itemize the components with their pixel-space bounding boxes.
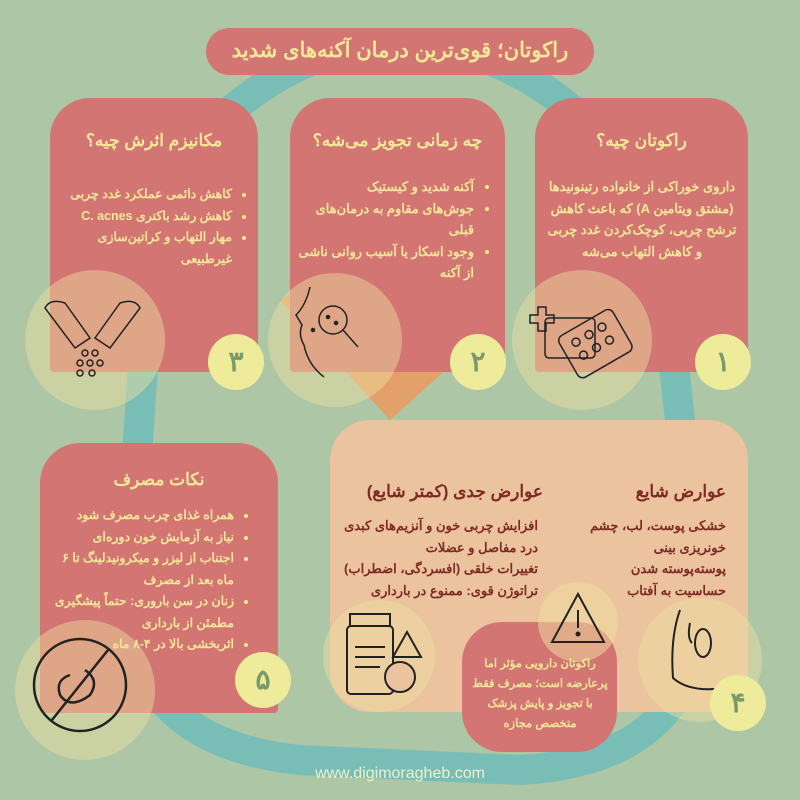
text serious — [344, 517, 538, 598]
text 5: اجتناب از لیزر و میکرونیدلینگ تا ۶ ماه بعد از مصرف — [62, 551, 234, 586]
icon: capsule — [44, 300, 141, 377]
text 5: اثربخشی بالا در ۴-۸ ماه — [112, 637, 234, 651]
icon: face magnifier — [295, 286, 358, 378]
icon: no pregnancy — [15, 620, 155, 760]
icon: pills blister — [529, 306, 633, 378]
icon: bottle — [346, 613, 423, 695]
number 4 — [710, 675, 766, 731]
text serious: تراتوژن قوی: ممنوع در بارداری — [371, 582, 538, 598]
text common — [590, 518, 726, 598]
heading serious: عوارض جدی (کمتر شایع) — [367, 482, 543, 501]
text common: خشکی پوست، لب، چشم — [590, 518, 726, 533]
number 2: ٢ — [470, 346, 486, 377]
number 5 — [235, 652, 291, 708]
text common: پوسته‌پوسته شدن — [631, 561, 726, 576]
text common: حساسیت به آفتاب — [627, 582, 726, 598]
text 5 — [55, 508, 248, 652]
text 2: وجود اسکار یا آسیب روانی ناشی از آکنه — [298, 244, 474, 280]
text 2 — [298, 178, 489, 280]
panel: usage tips — [40, 443, 278, 713]
text 5: زنان در سن باروری: حتماً پیشگیری مطمئن از بارداری — [55, 594, 234, 630]
panel: what is roaccutane — [535, 98, 748, 372]
text common: خونریزی بینی — [654, 540, 726, 554]
panel: side effects — [330, 420, 748, 712]
text serious: درد مفاصل و عضلات — [426, 540, 538, 554]
panel: when prescribed — [290, 98, 505, 372]
heading 5: نکات مصرف — [114, 470, 204, 489]
callout: warning: راکوتان دارویی مؤثر اما پرعارضه است؛ مصرف فقط با تجویز و پایش پزشک متخصص مجازه — [472, 658, 608, 730]
number 2 — [450, 334, 506, 390]
text serious: تغییرات خلقی (افسردگی، اضطراب) — [344, 561, 538, 576]
text 2: جوش‌های مقاوم به درمان‌های قبلی — [316, 200, 474, 237]
text 3: کاهش دائمی عملکرد غدد چربی — [70, 187, 232, 201]
number 3: ٣ — [228, 346, 244, 377]
text 5: نیاز به آزمایش خون دوره‌ای — [93, 530, 234, 544]
icon circles bottom — [323, 600, 435, 712]
text 2: آکنه شدید و کیستیک — [367, 179, 474, 194]
icon: warning — [538, 582, 618, 662]
icon: face — [671, 610, 714, 690]
text serious: افزایش چربی خون و آنزیم‌های کبدی — [344, 518, 538, 533]
number 5: ۵ — [255, 664, 271, 695]
text 3 — [70, 187, 246, 266]
number 1 — [695, 334, 751, 390]
number 1: ١ — [715, 346, 731, 377]
title: راکوتان؛ قوی‌ترین درمان آکنه‌های شدید — [232, 39, 568, 62]
footer url: www.digimoragheb.com — [315, 765, 485, 782]
heading common: عوارض شایع — [636, 482, 726, 501]
icon circles top — [512, 270, 652, 410]
text 3: مهار التهاب و کراتین‌سازی غیرطبیعی — [98, 230, 232, 266]
callout: warning — [462, 622, 617, 752]
title — [206, 28, 594, 75]
heading 1: راکوتان چیه؟ — [596, 131, 687, 150]
panel: mechanism — [50, 98, 258, 372]
number 3 — [208, 334, 264, 390]
number 4: ۴ — [730, 687, 746, 718]
text 1: داروی خوراکی از خانواده رتینونیدها (مشتق ویتامین A) که باعث کاهش ترشح چربی، کوچک‌کردن غدد چربی و کاهش التهاب می‌شه — [548, 179, 736, 258]
heading 3: مکانیزم اثرش چیه؟ — [86, 131, 222, 150]
heading 2: چه زمانی تجویز می‌شه؟ — [313, 131, 482, 150]
text 3: کاهش رشد باکتری C. acnes — [81, 208, 232, 222]
text 5: همراه غذای چرب مصرف شود — [77, 508, 234, 522]
